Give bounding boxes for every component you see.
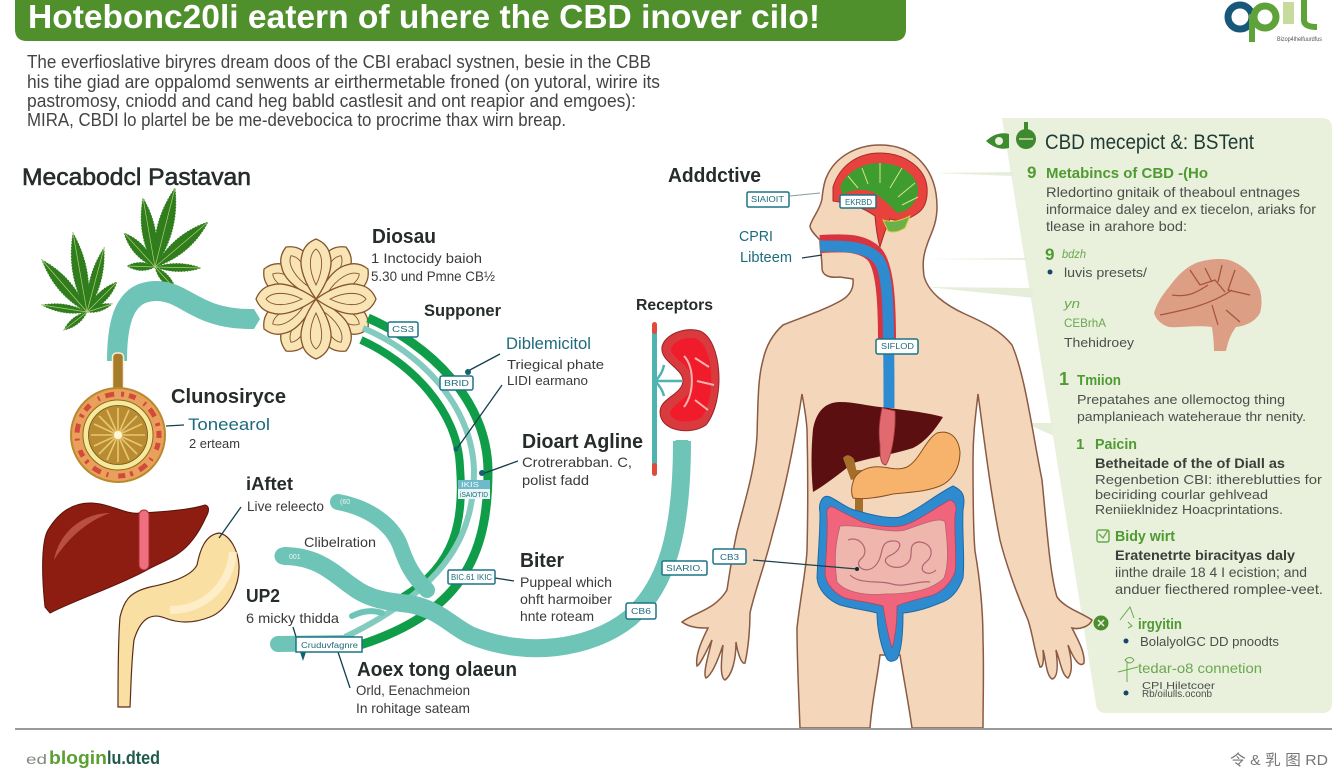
pipe tags: 001 <box>289 554 301 561</box>
label boxes on arc: BIC.61 IKIC <box>451 573 492 582</box>
section: cedar connection: Rb/oilulls.oconb <box>1142 689 1212 700</box>
heading: metabolic pathway: Mecabodcl Pastavan <box>22 164 251 191</box>
text: Aoex tong olaeun: In rohitage sateam <box>356 700 470 716</box>
intro paragraph: MIRA, CBDI lo plartel be be me-devebocica to procrime thax wirn breap. <box>27 110 566 130</box>
text: Dioart Agline: Dioart Agline <box>522 431 643 453</box>
organ: stomach <box>852 432 960 499</box>
text: Aoex tong olaeun: Aoex tong olaeun <box>357 659 517 681</box>
section: Paicin: Regenbetion CBI: ithereblutties for <box>1095 472 1323 487</box>
section: presets <box>1045 245 1147 350</box>
label boxes on arc: Cruduvfagnre <box>301 641 359 650</box>
section: Bidy wirt: anduer fiecthered romplee-veet. <box>1115 581 1323 597</box>
footer rule <box>15 728 1332 730</box>
label boxes on body: SIAIOIT <box>751 195 784 204</box>
intro paragraph: The everfioslative biryres dream doos of the CBI erabacl systnen, besie in the CBB <box>27 52 651 72</box>
section: Tmiion <box>1059 369 1306 424</box>
section: irgyitin: irgyitin <box>1138 616 1182 633</box>
section: Bidy wirt: iinthe draile 18 4 I ecistion; and <box>1115 564 1307 580</box>
label boxes on arc: CB6 <box>631 607 652 616</box>
text: Diosau <box>371 226 495 284</box>
text: Diosau: Diosau <box>372 226 436 248</box>
section: presets: CEBrhA <box>1064 316 1106 330</box>
section: metabolics: Rledortino gnitaik of theaboul entnages <box>1046 184 1300 200</box>
section: Paicin: Reniieklnidez Hoacprintations. <box>1095 502 1283 517</box>
section: Paicin: 1 <box>1076 436 1084 453</box>
section: Bidy wirt: Eratenetrte biracityas daly <box>1115 547 1295 563</box>
intro paragraph: his tihe giad are oppalomd senwents ar eirthermetable froned (on yutoral, wirire its <box>27 72 660 92</box>
pointer markers <box>300 369 485 661</box>
intro paragraph <box>27 52 660 130</box>
label boxes on arc: CS3 <box>392 325 415 334</box>
section: presets: bdzh <box>1062 247 1086 261</box>
text: Dioart Agline: Crotrerabban. C, <box>522 454 632 470</box>
text: iAftet <box>246 474 324 514</box>
text: Diblemicitol: Triegical phate <box>507 357 604 372</box>
organ: stomach neck <box>879 408 895 465</box>
footer brand: lu.dted <box>107 748 160 768</box>
section: irgyitin <box>1094 607 1279 649</box>
label boxes on body: SIFLOD <box>881 342 914 351</box>
text: Clibelration: Clibelration <box>304 534 376 550</box>
text: Clunosiryce: 2 erteam <box>189 436 240 451</box>
panel heading: CBD mecepict &: BSTent <box>1045 131 1254 154</box>
pointer: capsule line <box>166 425 184 426</box>
text: iAftet: Live releecto <box>247 498 324 514</box>
section: Tmiion: pamplanieach wateheraue thr nenity. <box>1077 409 1306 424</box>
section: cedar connection: tedar-o8 connetion <box>1138 660 1262 676</box>
text: Diosau: 5.30 und Pmne CB½ <box>371 268 495 284</box>
footer brand: blogin <box>49 748 107 768</box>
icon: flower <box>256 239 376 359</box>
icon: plant pot <box>1016 122 1036 149</box>
organ: gallbladder duct <box>843 455 863 516</box>
text: Aoex tong olaeun <box>356 659 517 716</box>
label boxes on arc: BRID <box>444 379 469 388</box>
organ: liver in body <box>812 402 943 492</box>
section: presets: yn <box>1063 296 1080 311</box>
pointer: intestine callout line <box>753 560 859 571</box>
section: presets: Thehidroey <box>1064 335 1135 350</box>
section: Paicin: Betheitade of the of Diall as <box>1095 455 1285 471</box>
arrow: teal pipes crossing <box>274 441 682 648</box>
section: Tmiion: 1 <box>1059 369 1069 389</box>
pointers: arc callout lines <box>293 354 518 688</box>
text: Clunosiryce <box>171 386 286 451</box>
arrow head chamfer <box>673 440 691 445</box>
section: Paicin: beciriding courlar gehlvead <box>1095 487 1268 502</box>
section: metabolics: informaice daley and ex tiecelon, ariaks for <box>1046 201 1316 217</box>
text: Dioart Agline <box>522 431 643 488</box>
text: iAftet: iAftet <box>246 474 293 494</box>
organ: brain <box>833 153 927 247</box>
label boxes on arc: SIARIO. <box>666 564 703 573</box>
section: Bidy wirt: Bidy wirt <box>1115 528 1175 545</box>
section: Paicin: Paicin <box>1095 436 1137 453</box>
text: Receptors: Receptors <box>636 297 713 314</box>
label boxes on arc: iSAIOTID <box>460 492 488 499</box>
text: Aoex tong olaeun: Orld, Eenachmeion <box>356 682 470 698</box>
label boxes on body: CB3 <box>720 553 740 562</box>
section: Paicin <box>1076 436 1323 517</box>
pointer: Adddctive box line <box>790 193 820 196</box>
section: Tmiion: Prepatahes ane ollemoctog thing <box>1077 392 1285 407</box>
label boxes on body <box>713 192 918 564</box>
text: UP2 <box>246 586 339 626</box>
logo <box>1228 0 1322 43</box>
intro paragraph: pastromosy, cniodd and cand heg babld castlesit and ont reapior and emgoes): <box>27 91 636 111</box>
text: CPRI Libteem <box>739 228 792 266</box>
section: irgyitin: BolalyolGC DD pnoodts <box>1140 634 1279 649</box>
pipe tags <box>289 499 350 561</box>
label boxes on body: EKRBD <box>845 198 872 207</box>
text: Diblemicitol <box>506 334 604 388</box>
icon: extraction capsule <box>71 353 165 482</box>
text: Adddctive: Adddctive <box>668 165 761 187</box>
icon: cannabis leaves <box>42 188 208 330</box>
section: presets: luvis presets/ <box>1064 265 1147 280</box>
section: cedar connection: CPI Hiletcoer <box>1142 681 1216 692</box>
text: Diblemicitol: Diblemicitol <box>506 334 591 353</box>
section: metabolics <box>1027 163 1316 234</box>
section: cedar connection <box>1118 658 1262 700</box>
organ: kidney <box>652 322 719 476</box>
icon: organ illustration <box>1154 259 1262 351</box>
organ: esophagus <box>820 243 889 408</box>
logo: Bizop4lhelfuurdfus <box>1277 37 1322 43</box>
pointer: Libteem line <box>802 255 822 258</box>
text: Biter <box>520 550 612 624</box>
pipe tags: (60 <box>340 499 350 506</box>
section: Bidy wirt <box>1097 528 1323 597</box>
organ: liver and gut left <box>43 503 239 707</box>
text: CPRI Libteem: CPRI <box>739 228 773 245</box>
text: UP2: 6 micky thidda <box>246 610 339 626</box>
chart: green circulation arc <box>345 318 488 645</box>
text: Biter: Biter <box>520 550 564 572</box>
text: UP2: UP2 <box>246 586 280 606</box>
arrow tip <box>248 309 260 329</box>
label boxes on arc: IKIS <box>461 482 479 489</box>
text: Diosau: 1 Inctocidy baioh <box>371 250 482 266</box>
text: Biter: ohft harmoiber <box>520 591 612 607</box>
arrow: teal pipe from leaves to flower <box>117 291 250 361</box>
organ: colon <box>817 486 964 661</box>
label boxes on arc <box>296 322 707 652</box>
text: Clunosiryce: Toneearol <box>188 415 270 434</box>
icon: eye <box>986 133 1009 149</box>
text: Supponer: Supponer <box>424 301 501 320</box>
section: metabolics: Metabincs of CBD -(Ho <box>1046 165 1208 182</box>
section: Tmiion: Tmiion <box>1077 372 1121 389</box>
footer brand <box>26 748 160 768</box>
text: CPRI Libteem: Libteem <box>740 249 792 266</box>
panel: CBD receptor background <box>925 118 1332 713</box>
section: presets: 9 <box>1045 245 1054 264</box>
text: Dioart Agline: polist fadd <box>522 472 589 488</box>
section: metabolics: 9 <box>1027 163 1036 182</box>
body figure <box>682 145 1092 728</box>
text: Biter: hnte roteam <box>520 608 594 624</box>
footer brand: ed <box>26 751 47 767</box>
text: Biter: Puppeal which <box>520 574 612 590</box>
text: Diblemicitol: LIDI earmano <box>507 373 588 388</box>
section: metabolics: tlease in arahore bod: <box>1046 218 1187 234</box>
pointer: liver label <box>219 507 241 538</box>
text: Clunosiryce: Clunosiryce <box>171 386 286 408</box>
